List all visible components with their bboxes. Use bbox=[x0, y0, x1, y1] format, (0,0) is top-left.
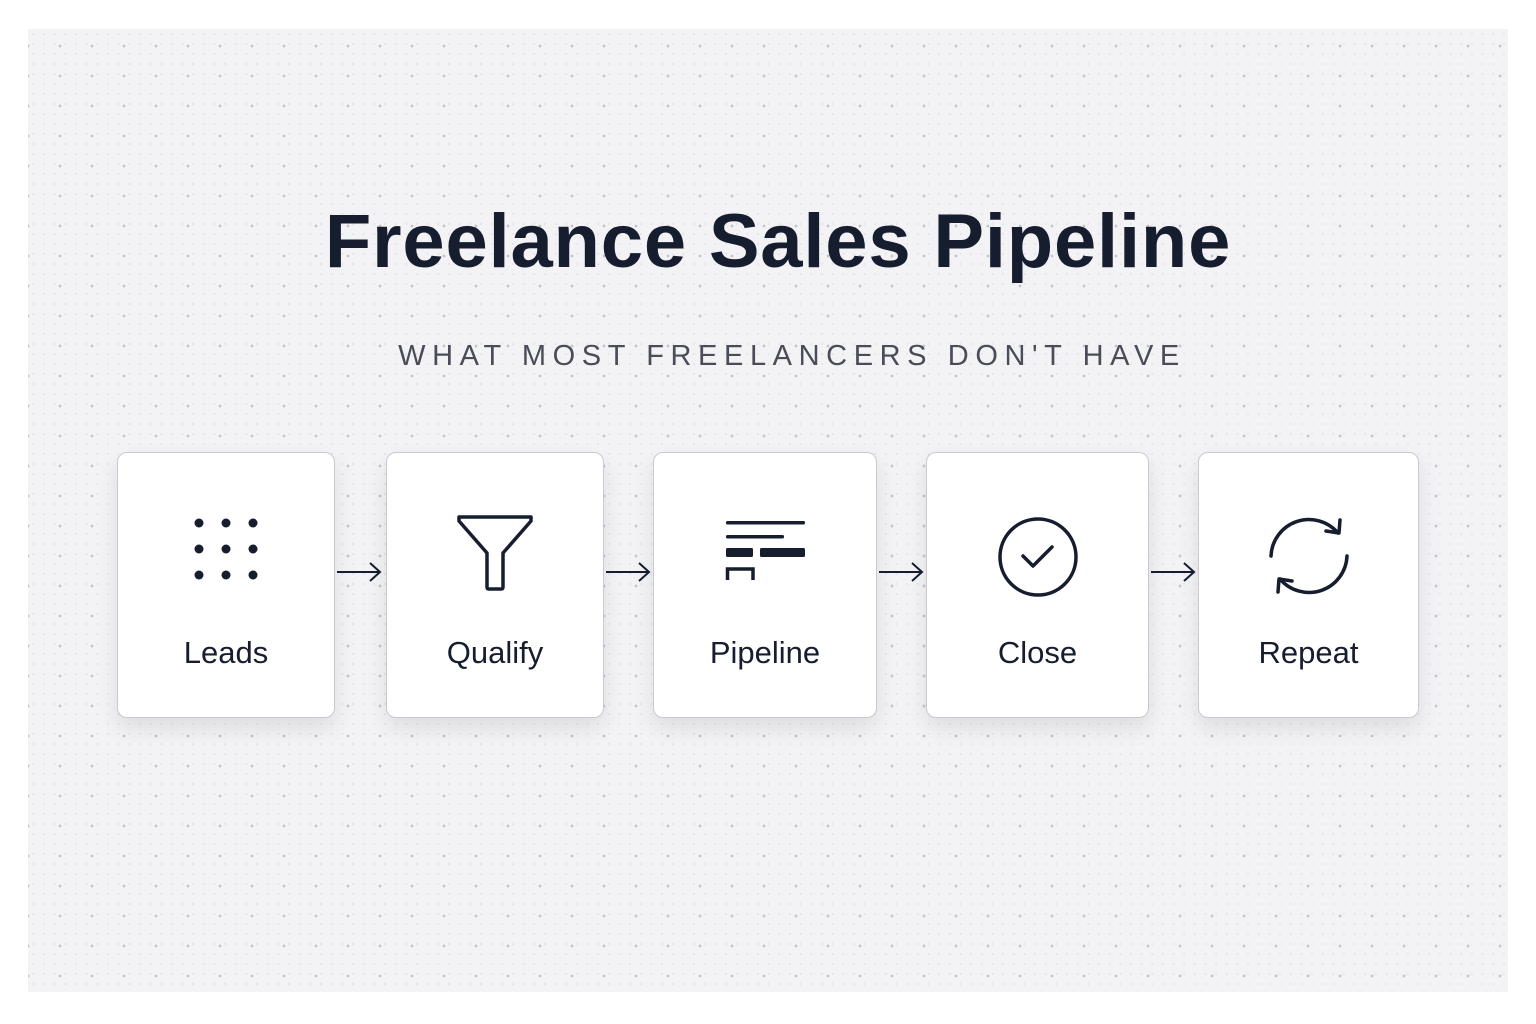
card: repeat bbox=[1198, 452, 1419, 718]
icon: funnel bbox=[457, 515, 533, 591]
card: qualify bbox=[386, 452, 604, 718]
icon: dots grid bbox=[194, 518, 258, 580]
subtitle: WHAT MOST FREELANCERS DON'T HAVE bbox=[398, 340, 1186, 372]
icon: refresh bbox=[1269, 518, 1349, 594]
label: Qualify: Qualify bbox=[447, 635, 543, 670]
icon: check circle bbox=[998, 517, 1078, 597]
label: Pipeline: Pipeline bbox=[710, 635, 820, 670]
arrow 4 bbox=[1151, 562, 1196, 582]
card: leads bbox=[117, 452, 335, 718]
title: Freelance Sales Pipeline bbox=[325, 199, 1231, 284]
card: pipeline bbox=[653, 452, 877, 718]
label: Repeat: Repeat bbox=[1259, 635, 1358, 670]
arrow 2 bbox=[606, 562, 650, 582]
label: Close: Close bbox=[998, 635, 1077, 670]
label: Leads: Leads bbox=[184, 635, 268, 670]
icon: pipeline bars bbox=[726, 521, 805, 580]
arrow 1 bbox=[337, 562, 382, 582]
arrow 3 bbox=[879, 562, 924, 582]
card: close bbox=[926, 452, 1149, 718]
